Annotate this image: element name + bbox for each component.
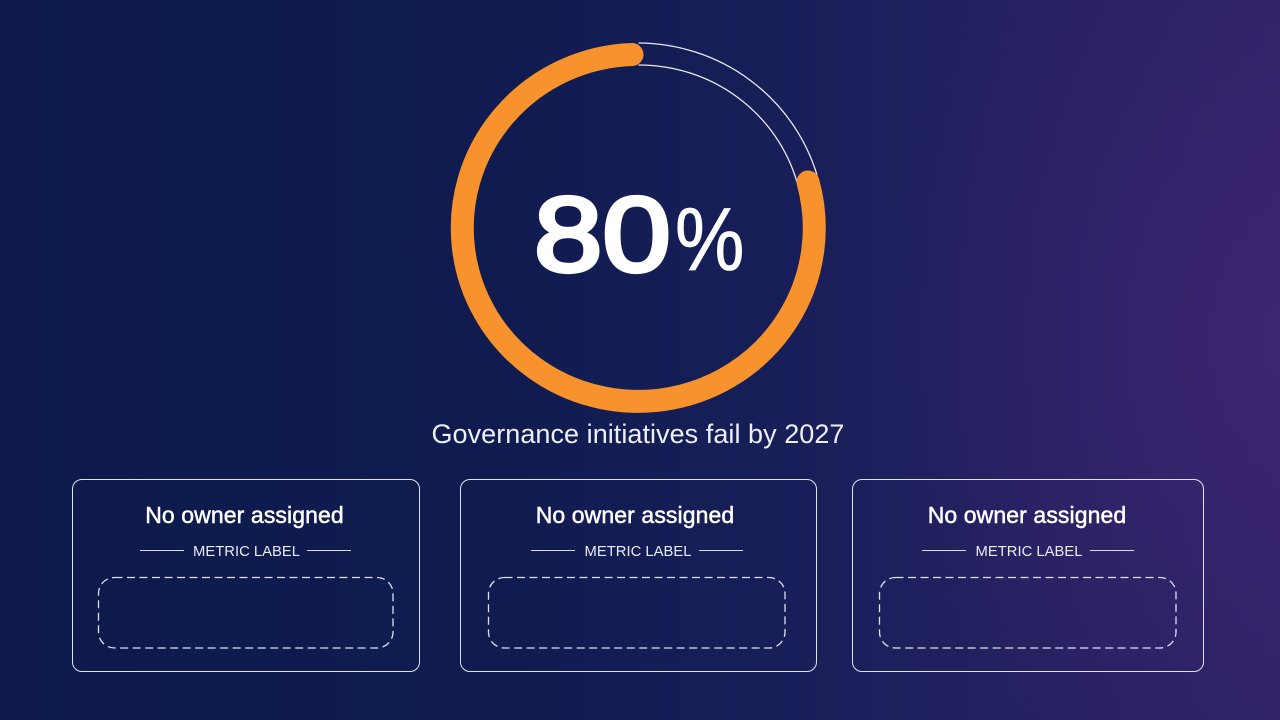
card heading: No owner assigned bbox=[145, 502, 344, 528]
orange progress arc bbox=[462, 54, 814, 401]
big percentage number: 80 bbox=[534, 176, 671, 294]
dashed placeholder bbox=[98, 576, 394, 649]
panel: card 3 bbox=[852, 479, 1204, 672]
dashed placeholder bbox=[878, 576, 1177, 649]
caption: Governance initiatives fail by 2027 bbox=[432, 419, 844, 449]
percent sign: % bbox=[675, 189, 744, 289]
remaining track inner bbox=[638, 65, 797, 182]
remaining track outer bbox=[638, 43, 817, 175]
metric label: METRIC LABEL bbox=[193, 544, 300, 560]
metric label: METRIC LABEL bbox=[976, 544, 1082, 560]
panel: card 2 bbox=[460, 479, 817, 672]
metric label: METRIC LABEL bbox=[585, 544, 691, 560]
card heading: No owner assigned bbox=[536, 502, 734, 528]
card heading: No owner assigned bbox=[928, 502, 1126, 528]
panel: card 1 bbox=[72, 479, 420, 672]
dashed placeholder bbox=[488, 576, 786, 649]
